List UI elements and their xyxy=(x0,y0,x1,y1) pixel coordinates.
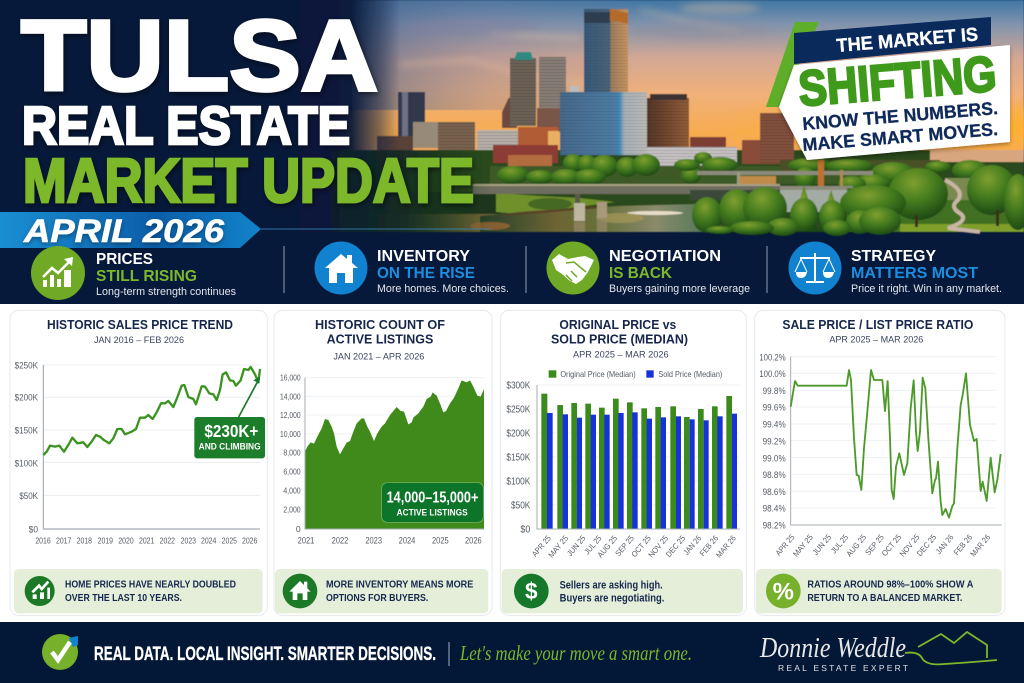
upper bridge xyxy=(697,171,873,175)
callout: sellers and buyers: $ xyxy=(525,578,538,604)
bar chart: $300K xyxy=(506,380,531,391)
bar chart: JUL 25 xyxy=(582,533,604,556)
shoreline, banks and river xyxy=(360,192,500,226)
heading: ACTIVE LISTINGS xyxy=(327,332,433,347)
line chart: OCT 25 xyxy=(880,532,904,558)
stat: strategy matters most: STRATEGY xyxy=(851,248,937,265)
legend: Sold Price (Median) xyxy=(658,369,722,379)
heading: HISTORIC SALES PRICE TREND xyxy=(47,317,233,332)
line chart: 100.2% xyxy=(759,352,786,362)
icon: check badge xyxy=(42,634,78,670)
panel: original vs sold price xyxy=(500,310,746,615)
line chart: FEB 26 xyxy=(952,532,975,557)
date range: APR 2025 – MAR 2026 xyxy=(829,335,923,345)
stat: inventory on the rise xyxy=(314,242,509,295)
callout: ratios: RATIOS AROUND 98%–100% SHOW A xyxy=(807,580,973,591)
tagline: REAL DATA. LOCAL INSIGHT. SMARTER DECISIONS. xyxy=(94,644,436,665)
script slogan: Let's make your move a smart one. xyxy=(459,641,692,665)
badge: $230K+ and climbing: AND CLIMBING xyxy=(199,442,261,452)
area chart: 2021 xyxy=(298,536,314,546)
line chart: 2017 xyxy=(56,536,71,546)
area chart: 10,000 xyxy=(280,429,301,439)
towers xyxy=(502,97,517,128)
stat: negotiation is back: NEGOTIATION xyxy=(609,248,721,265)
line chart: MAR 26 xyxy=(969,532,993,559)
legend: Original Price (Median) xyxy=(560,369,636,379)
line chart: 99.6% xyxy=(763,403,786,413)
badge: $230K+ and climbing: $230K+ xyxy=(204,421,258,441)
bar chart: OCT 25 xyxy=(630,533,653,559)
area chart: 0 xyxy=(296,524,301,534)
line chart: 98.8% xyxy=(763,470,786,480)
bar chart: $50K xyxy=(511,500,531,511)
foreground trees xyxy=(692,165,1024,236)
date range: JAN 2021 – APR 2026 xyxy=(333,352,424,362)
bar chart: SEP 25 xyxy=(614,533,636,558)
panel: sale price to list price ratio xyxy=(755,310,1005,615)
area chart: 8,000 xyxy=(283,448,301,458)
callout: home prices doubled xyxy=(14,569,263,613)
area chart: 6,000 xyxy=(283,466,301,476)
area chart: 2024 xyxy=(399,536,415,546)
bar chart: $150K xyxy=(506,452,531,463)
line chart: APR 25 xyxy=(774,532,797,558)
bar chart xyxy=(506,380,740,560)
area chart: 4,000 xyxy=(283,485,301,495)
line chart: JAN 26 xyxy=(934,532,956,556)
line chart: 2024 xyxy=(201,536,216,546)
bar chart: JAN 26 xyxy=(682,533,704,557)
callout: more inventory xyxy=(275,569,488,613)
line chart: 2020 xyxy=(118,536,134,546)
badge: active listings: 14,000–15,000+ xyxy=(387,489,478,506)
callout: sellers and buyers: Buyers are negotiating. xyxy=(560,593,664,605)
stat: prices still rising: PRICES xyxy=(96,251,153,268)
bar chart: MAR 26 xyxy=(714,533,738,560)
heading xyxy=(551,317,688,347)
bridge deck and piers xyxy=(473,184,780,194)
title: REAL ESTATE: REAL ESTATE xyxy=(22,96,350,156)
logo: Donnie Weddle: REAL ESTATE EXPERT xyxy=(778,663,908,673)
line chart: 2025 xyxy=(222,536,237,546)
badge: active listings: ACTIVE LISTINGS xyxy=(397,507,468,517)
bar chart: $100K xyxy=(506,476,531,487)
callout: home prices doubled: HOME PRICES HAVE NEARLY DOUBLED xyxy=(65,580,236,591)
line chart: $50K xyxy=(19,491,39,501)
line chart: SEP 25 xyxy=(864,532,886,557)
date range: APR 2025 – MAR 2026 xyxy=(573,350,669,360)
line chart: JUN 25 xyxy=(811,532,834,557)
stat: negotiation is back: IS BACK xyxy=(609,265,673,282)
footer band xyxy=(0,622,1024,683)
line chart: DEC 25 xyxy=(915,532,939,558)
line chart: AUG 25 xyxy=(845,532,869,559)
area chart: 2023 xyxy=(365,536,382,546)
title: MARKET UPDATE: MARKET UPDATE xyxy=(23,147,474,216)
area chart: 2026 xyxy=(465,536,482,546)
callout: sellers and buyers: Sellers are asking high. xyxy=(560,579,663,591)
stat: negotiation is back xyxy=(546,242,750,295)
date range: JAN 2016 – FEB 2026 xyxy=(94,335,184,345)
bar chart: AUG 25 xyxy=(596,533,620,560)
stat strip xyxy=(31,242,1002,300)
title block xyxy=(21,0,474,216)
line chart: 2019 xyxy=(98,536,113,546)
heading xyxy=(315,317,445,347)
line chart: 98.4% xyxy=(763,504,786,514)
line chart: 2016 xyxy=(35,536,51,546)
stat: prices still rising: STILL RISING xyxy=(96,268,197,285)
stat: prices still rising xyxy=(31,246,236,300)
callout: the market is shifting: THE MARKET IS xyxy=(836,24,979,57)
callout: the market is shifting: KNOW THE NUMBERS. xyxy=(802,98,999,134)
callout: the market is shifting: MAKE SMART MOVES. xyxy=(802,119,999,155)
stat: strategy matters most: Price it right. Win in any market. xyxy=(851,283,1002,295)
bar chart: JUN 25 xyxy=(565,533,588,558)
title: TULSA: TULSA xyxy=(21,0,378,112)
callout: home prices doubled: OVER THE LAST 10 YEARS. xyxy=(65,593,182,604)
stat: strategy matters most xyxy=(788,242,1002,295)
line chart: JUL 25 xyxy=(829,532,851,555)
line chart: $250K xyxy=(15,360,39,370)
bar chart: $0 xyxy=(520,524,531,535)
line chart: $100K xyxy=(15,458,39,468)
bar chart: MAY 25 xyxy=(547,533,571,560)
bar chart: DEC 25 xyxy=(664,533,688,559)
header band xyxy=(0,0,1024,304)
bar chart: FEB 26 xyxy=(698,533,721,558)
line chart: 99.8% xyxy=(763,386,786,396)
heading: SALE PRICE / LIST PRICE RATIO xyxy=(782,317,973,332)
line chart: 98.6% xyxy=(763,487,786,497)
right grass xyxy=(847,188,1024,232)
line chart: 98.2% xyxy=(763,521,786,531)
stat: negotiation is back: Buyers gaining more leverage xyxy=(609,283,750,295)
stat: inventory on the rise: INVENTORY xyxy=(377,248,471,265)
line chart: 2026 xyxy=(242,536,257,546)
callout: sellers and buyers xyxy=(502,569,743,613)
stat: prices still rising: Long-term strength continues xyxy=(96,286,236,298)
skyline photo xyxy=(300,0,1024,236)
badge: $230K+ and climbing xyxy=(194,417,265,458)
bar chart: $250K xyxy=(506,404,531,415)
area chart: 14,000 xyxy=(280,391,301,401)
stat: inventory on the rise: More homes. More choices. xyxy=(377,283,509,295)
heading: SOLD PRICE (MEDIAN) xyxy=(551,332,688,347)
logo: Donnie Weddle: Donnie Weddle xyxy=(759,633,906,664)
callout: more inventory: OPTIONS FOR BUYERS. xyxy=(326,593,429,604)
line chart: 2023 xyxy=(181,536,196,546)
area chart: 2,000 xyxy=(283,504,301,514)
callout: more inventory: MORE INVENTORY MEANS MORE xyxy=(326,580,474,591)
road and mid trees xyxy=(490,166,890,184)
date ribbon: April 2026: APRIL 2026 xyxy=(23,213,224,249)
stat: inventory on the rise: ON THE RISE xyxy=(377,265,475,282)
bar chart: $200K xyxy=(506,428,531,439)
area chart: 16,000 xyxy=(280,373,301,383)
callout: ratios: % xyxy=(773,579,794,606)
skyline far left xyxy=(398,92,425,139)
area chart: 2022 xyxy=(332,536,348,546)
line chart: 99.0% xyxy=(763,453,786,463)
panel: historic count of active listings xyxy=(274,310,492,615)
bar chart: NOV 25 xyxy=(647,533,671,560)
line chart: $200K xyxy=(15,393,39,403)
callout: ratios xyxy=(756,569,1002,613)
legend xyxy=(549,369,722,379)
stat: strategy matters most: MATTERS MOST xyxy=(851,265,979,282)
line chart xyxy=(759,352,1002,559)
line chart: NOV 25 xyxy=(898,532,922,559)
line chart: MAY 25 xyxy=(791,532,815,559)
callout: ratios: RETURN TO A BALANCED MARKET. xyxy=(807,593,963,604)
line chart: $150K xyxy=(15,425,39,435)
callout: the market is shifting xyxy=(766,17,1010,160)
line chart: 2021 xyxy=(139,536,154,546)
line chart: 2018 xyxy=(77,536,92,546)
heading: HISTORIC COUNT OF xyxy=(315,317,445,332)
line chart: 99.4% xyxy=(763,420,786,430)
area chart: 12,000 xyxy=(280,410,301,420)
area chart xyxy=(280,373,484,546)
line chart xyxy=(15,360,260,546)
bar chart: APR 25 xyxy=(530,533,553,559)
left fade over photo xyxy=(330,0,400,232)
badge: active listings xyxy=(382,483,483,522)
date ribbon: April 2026 xyxy=(0,212,491,249)
line chart: 99.2% xyxy=(763,436,786,446)
line chart: 2022 xyxy=(160,536,175,546)
heading: ORIGINAL PRICE vs xyxy=(559,317,676,332)
line chart: $0 xyxy=(29,524,38,534)
panel: historic sales price trend xyxy=(10,310,267,615)
area chart: 2025 xyxy=(432,536,449,546)
logo: Donnie Weddle xyxy=(759,632,997,673)
line chart: 100.0% xyxy=(759,369,786,379)
